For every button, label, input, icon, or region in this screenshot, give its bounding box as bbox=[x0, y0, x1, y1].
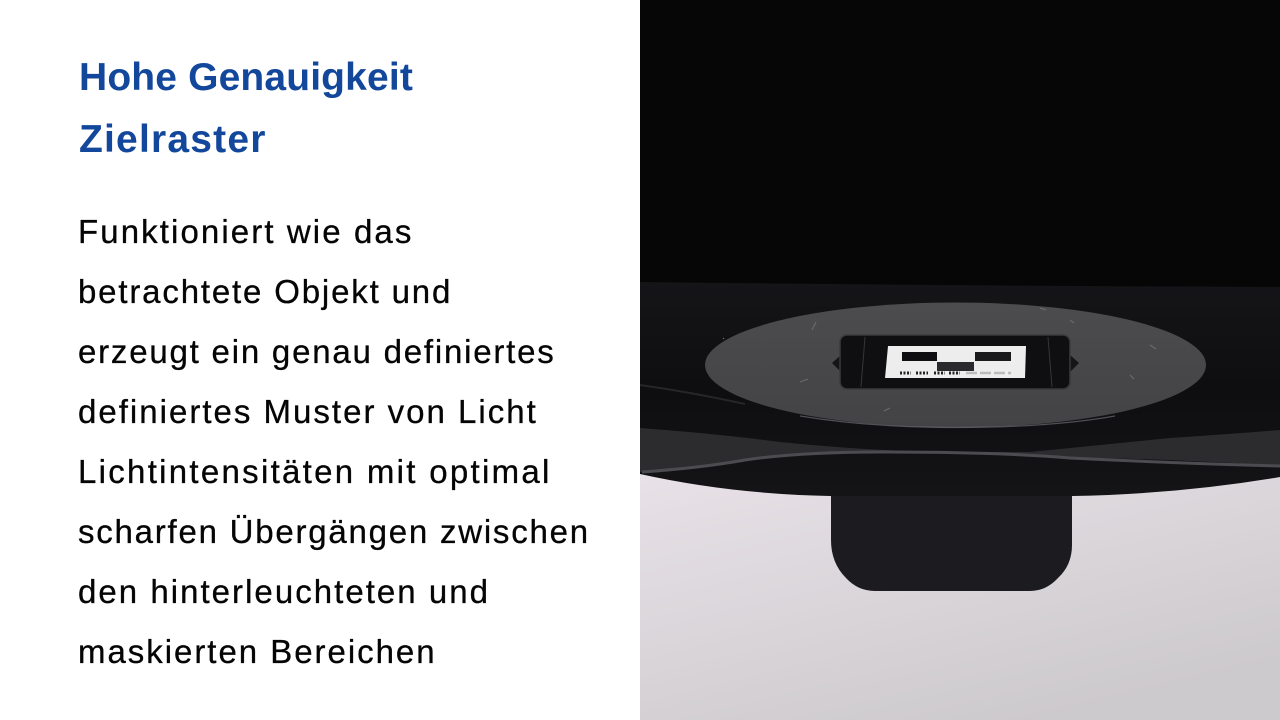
target holder bbox=[832, 335, 1079, 389]
body text: definiertes Muster von Licht bbox=[78, 393, 538, 430]
dark top surface bbox=[640, 282, 1280, 496]
faint surface line bbox=[640, 385, 745, 404]
highlight line bbox=[642, 452, 1280, 472]
body text: Lichtintensitäten mit optimal bbox=[78, 453, 552, 490]
body text: maskierten Bereichen bbox=[78, 633, 437, 670]
body text bbox=[78, 213, 590, 670]
circular plate bbox=[705, 302, 1206, 428]
grey bevel band bbox=[640, 428, 1280, 472]
body text: erzeugt ein genau definiertes bbox=[78, 333, 556, 370]
body text: scharfen Übergängen zwischen bbox=[78, 513, 590, 550]
body text: Funktioniert wie das bbox=[78, 213, 413, 250]
target pattern bbox=[885, 346, 1026, 378]
white device body bbox=[640, 465, 1280, 720]
body text: den hinterleuchteten und bbox=[78, 573, 490, 610]
heading: Hohe Genauigkeit bbox=[79, 56, 413, 99]
body text: betrachtete Objekt und bbox=[78, 273, 452, 310]
heading bbox=[79, 56, 413, 161]
panel: text bbox=[0, 0, 640, 720]
panel: product photo bbox=[640, 0, 1280, 720]
heading: Zielraster bbox=[79, 118, 267, 161]
tab bbox=[831, 496, 1072, 591]
